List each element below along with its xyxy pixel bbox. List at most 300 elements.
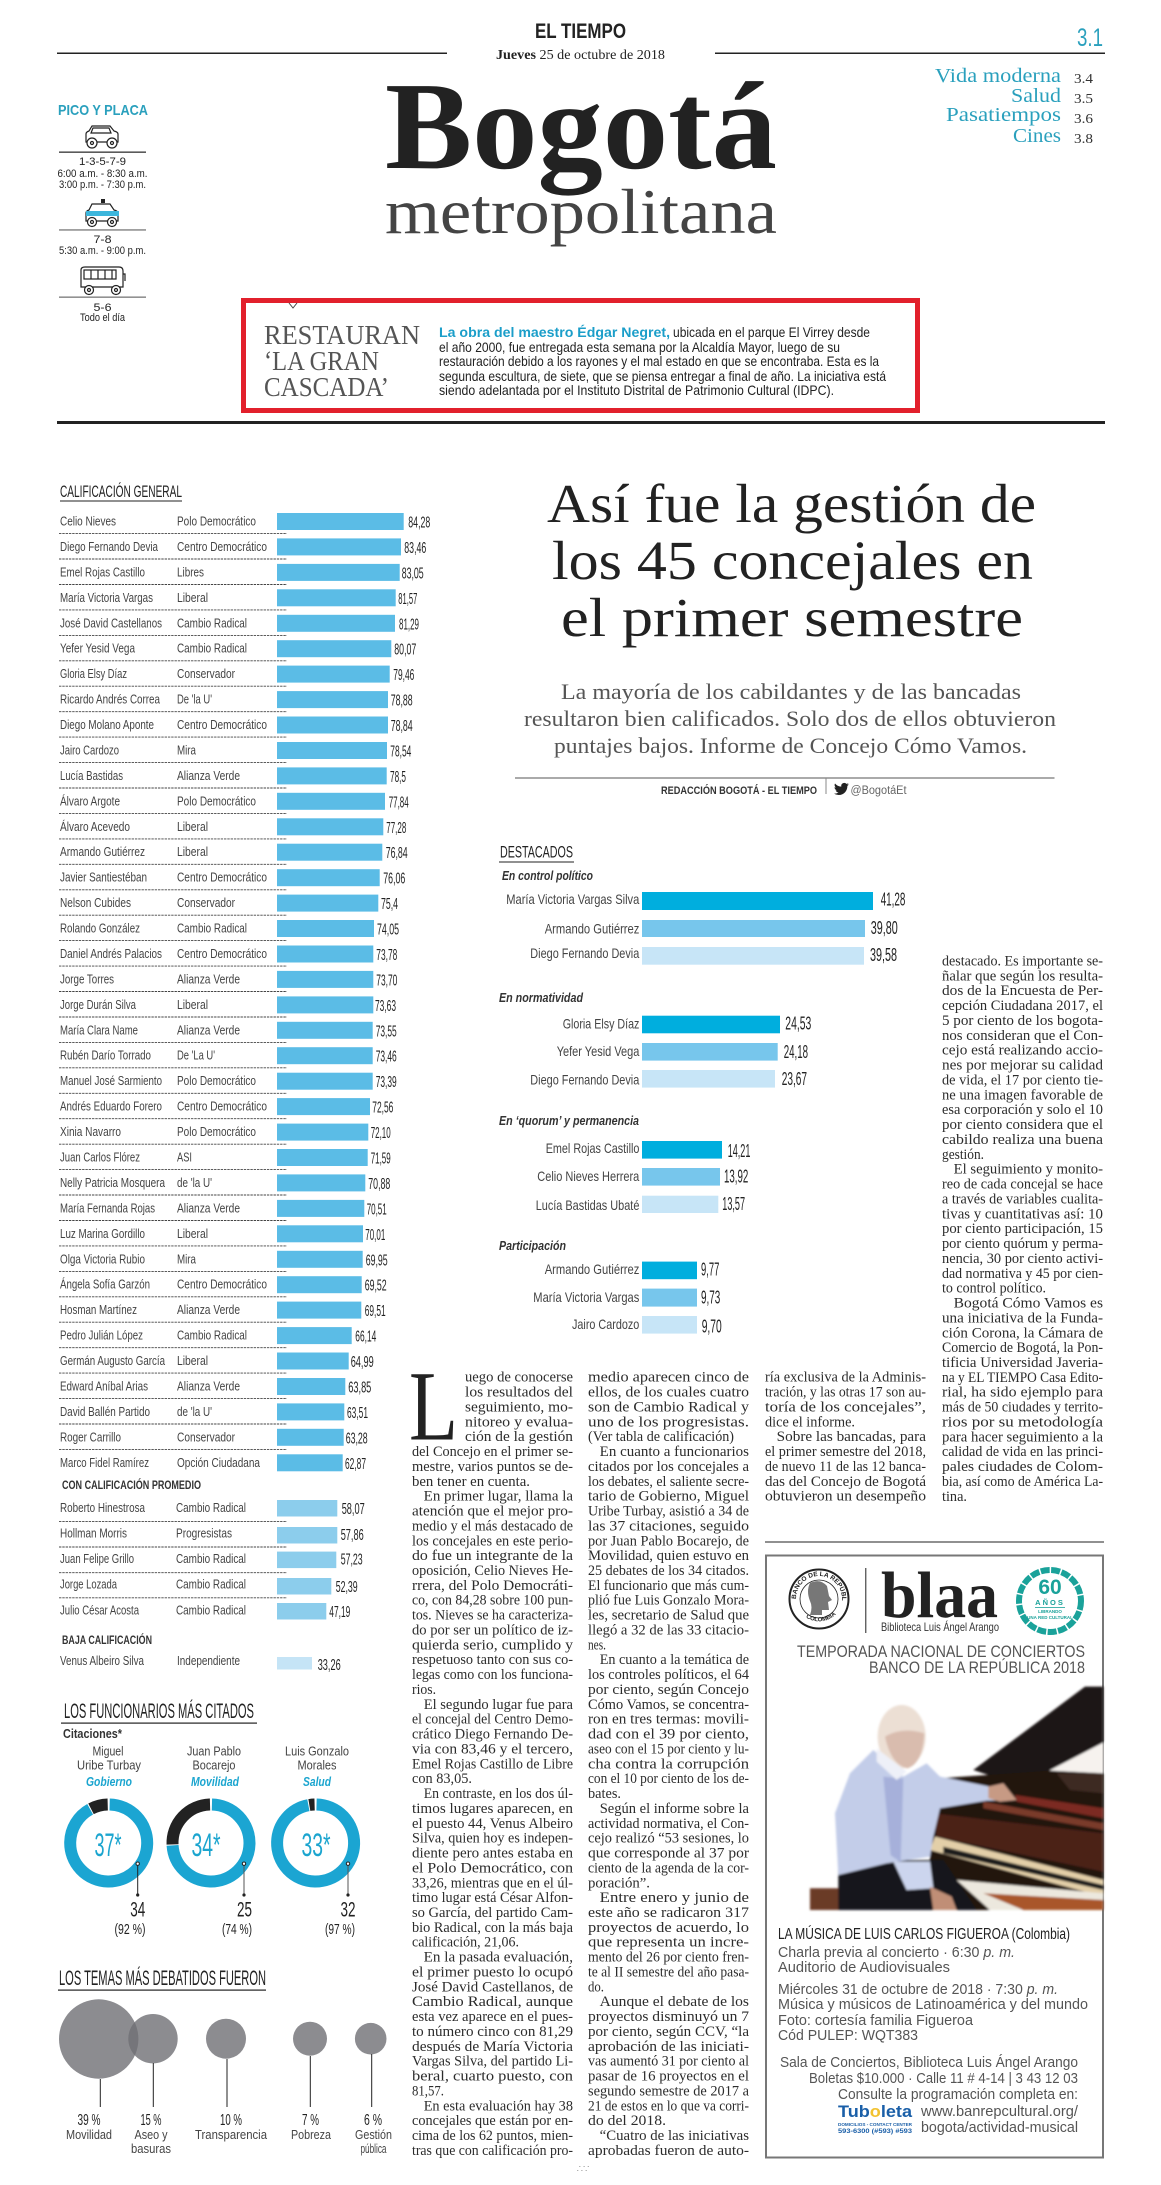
article text: column 3: el primer semestre del 2018, [765,1444,926,1460]
bar chart: participación: 9,70 [702,1316,722,1336]
article text: column 1: Cambio Radical, aunque [412,1994,573,2010]
donut: Miguel Uribe Turbay: Miguel [92,1744,124,1758]
article text: column 4: esa corporación y solo el 10 [942,1102,1103,1118]
bar chart: councillor names: Celio Nieves [60,514,116,528]
bar chart: councillor names: José David Castellanos [60,616,162,630]
heavy divider under the header [57,421,1105,424]
ad details: Boletas $10.000 · Calle 11 # 4-14 | 3 43 12 03 [809,2070,1078,2087]
article text: column 2: las 37 citaciones, seguido [588,1518,749,1534]
article text: column 2: ellos, de los cuales cuatro [588,1385,749,1401]
ad title: TEMPORADA NACIONAL DE CONCIERTOS [797,1642,1085,1661]
article text: column 2: tario de Gobierno, Miguel [588,1489,749,1505]
article text: column 1: con 83,05. [412,1771,472,1787]
bar chart: en quorum y permanencia [499,1114,750,1214]
panel: pico y placa: 3:00 p.m. - 7:30 p.m. [59,179,146,191]
logo: blaa: blaa [881,1559,998,1632]
bar chart: values: 84,28 [408,514,430,532]
article text: column 4: más de 50 ciudades y territo- [942,1400,1103,1416]
bar chart: participación: María Victoria Vargas [533,1289,639,1305]
article text: column 2: 21 de estos en lo que va corri- [588,2098,749,2114]
bubble labels: Aseo y [134,2128,168,2142]
bar chart: en quorum y permanencia: En ‘quorum’ y permanencia [499,1114,639,1128]
bar chart: participación: 9,77 [701,1259,719,1279]
article text: column 3: toría de los concejales”, [765,1399,926,1415]
bar chart: parties: Cambio Radical [177,1329,247,1343]
bar chart: values: 78,54 [390,744,412,760]
article text: column 4: nes por mejorar su calidad [942,1058,1104,1074]
subsection: con calificación promedio [60,1477,365,1621]
article text: column 2: uno de los progresistas. [588,1414,749,1430]
article text: column 2: aseo con el 15 por ciento y lu- [588,1741,749,1757]
article text: column 4: Bogotá Cómo Vamos es [954,1296,1103,1312]
callout body text: La obra del maestro Édgar Negret, [439,324,670,340]
bar chart: parties: Centro Democrático [177,1100,267,1114]
bar chart: en control político: 39,80 [871,918,898,938]
ad details: Sala de Conciertos, Biblioteca Luis Ángel Arango [780,2054,1078,2071]
article text: column 4: dos de la Encuesta de Per- [942,983,1103,999]
bar chart: en control político: María Victoria Vargas Silva [506,891,639,907]
article text: column 4: to control político. [942,1281,1046,1297]
bar chart: participación: 9,73 [701,1287,720,1307]
bar chart: councillor names: Jairo Cardozo [60,744,119,758]
article text: column 1: los concejales en este perio- [412,1533,573,1549]
heading: los funcionarios más citados: LOS FUNCIONARIOS MÁS CITADOS [64,1700,254,1723]
callout heading: CASCADA’ [264,372,389,402]
bar chart: en normatividad: En normatividad [499,991,583,1005]
bar chart: values: 81,57 [398,591,417,608]
heading: los temas más debatidos fueron: LOS TEMAS MÁS DEBATIDOS FUERON [59,1967,266,1990]
bar chart: councillor names: Nelson Cubides [60,896,131,910]
bar chart: parties: Liberal [177,820,208,834]
bar chart: values: 63,28 [346,1430,368,1447]
article text: column 4 [942,954,1104,1505]
bar chart: councillor names: Olga Victoria Rubio [60,1252,145,1266]
bar chart: councillor names: Emel Rojas Castillo [60,565,145,579]
bar chart: councillor names: Luz Marina Gordillo [60,1227,145,1241]
article text: column 2: cejo realizó “53 sesiones, lo [588,1831,749,1847]
article text: column 2: Movilidad, quien estuvo en [588,1548,750,1564]
bar chart: values [345,514,430,1473]
logo: 60 años [1019,1570,1081,1632]
article text: column 1: calificación, 21,06. [412,1935,519,1951]
donut: Luis Gonzalo Morales [271,1744,360,1938]
ad details: bogota/actividad-musical [921,2119,1078,2136]
bar chart: values: 76,84 [386,845,408,862]
article text: column 4: tivas y cuantitativas así: 10 [942,1206,1103,1222]
bar chart: en quorum y permanencia: 13,57 [722,1194,745,1214]
bar chart: parties: ASI [177,1150,192,1164]
article text: column 2: cha contra la corrupción [588,1756,750,1772]
subsection: con calificación promedio: Hollman Morris [60,1527,127,1541]
bar chart: en quorum y permanencia: 13,92 [724,1166,748,1186]
subsection: con calificación promedio: 52,39 [336,1579,358,1596]
article text: column 2: En cuanto a la temática de [600,1652,749,1668]
ad details: Música y músicos de Latinoamérica y del mundo [778,1996,1088,2013]
byline: REDACCIÓN BOGOTÁ - EL TIEMPO [661,784,817,797]
bar chart: councillor names: Diego Fernando Devia [60,540,158,554]
panel: pico y placa: 5-6 [94,302,112,314]
bar chart: participación: Jairo Cardozo [572,1316,639,1332]
bar chart: parties: Liberal [177,845,208,859]
article text: column 2: Cómo Vamos, se concentra- [588,1697,749,1713]
article text: column 4: tina. [942,1489,967,1505]
panel: los funcionarios más citados: Citaciones* [63,1727,122,1741]
bar chart: parties: de 'la U' [177,1405,212,1419]
article text: column 2: nes. [588,1637,606,1653]
bar chart: values: 64,99 [351,1354,374,1371]
article text: column 1: timo lugar está César Alfon- [412,1890,573,1906]
bar chart: councillor names: Hosman Martínez [60,1303,137,1317]
donut: Juan Pablo Bocarejo: Bocarejo [192,1758,236,1772]
subsection: con calificación promedio: Progresistas [176,1527,232,1541]
article text: column 1: bio Radical, con la más baja [412,1920,574,1936]
panel: pico y placa: Todo el día [80,312,126,324]
bar chart: en quorum y permanencia: Celio Nieves Herrera [537,1168,639,1184]
donut: Luis Gonzalo Morales: Morales [298,1758,336,1772]
subsection: con calificación promedio: CON CALIFICACIÓN PROMEDIO [62,1477,201,1492]
masthead: newspaper name, date and rules [57,20,1105,63]
article text: column 3: ría exclusiva de la Adminis- [765,1370,926,1386]
ad details: Charla previa al concierto · 6:30 p. m. [778,1944,1015,1961]
ad details: Foto: cortesía familia Figueroa [778,2012,974,2029]
article text: column 1: oposición, Celio Nieves He- [412,1563,573,1579]
article text: column 1: so García, del partido Cam- [412,1905,573,1921]
bar chart: values: 70,51 [367,1201,387,1218]
callout heading [264,320,420,402]
article text: column 2: do. [588,1979,604,1995]
bar chart: parties: de 'la U' [177,1176,212,1190]
article text: column 1: después de María Victoria [412,2039,574,2055]
bar chart: values: 62,87 [345,1456,366,1473]
bar chart: values: 78,5 [390,769,406,786]
article text: column 1: timos lugares aparecen, en [412,1801,574,1817]
bar chart: en control político: Diego Fernando Devia [530,945,639,961]
subsection: con calificación promedio: 57,23 [341,1552,363,1569]
ad details: Cód PULEP: WQT383 [778,2027,918,2044]
article text: column 3 [765,1370,927,1505]
bubble labels: Pobreza [291,2128,331,2142]
callout body text: restauración debido a los rayones y el mal estado en que se encontraba. Esta es la [439,353,879,369]
bar chart: councillor names [60,514,165,1470]
index of sections: 3.5 [1074,92,1093,107]
article text: column 1: el Polo Democrático, con [412,1860,574,1876]
callout heading: RESTAURAN [264,320,420,350]
panel: destacados [499,842,905,1336]
bubble labels: Gestión [355,2128,392,2142]
donut: Luis Gonzalo Morales: (97 %) [325,1921,355,1938]
callout body text: segunda escultura, de siete, que se piensa entregar a final de año. La iniciativa está [439,368,886,384]
article text: column 2: aprobación de las iniciati- [588,2039,749,2055]
index of sections: Cines [1013,125,1061,147]
masthead: newspaper name, date and rules: EL TIEMPO [535,20,626,43]
bar chart: values: 69,95 [366,1252,388,1269]
headline: el primer semestre [561,587,1023,648]
subsection: con calificación promedio: Cambio Radical [176,1578,246,1592]
article text: column 2: do del 2018. [588,2113,666,2129]
bar chart: values: 73,39 [376,1074,397,1091]
donut: Juan Pablo Bocarejo: 25 [237,1898,252,1922]
ad title: BANCO DE LA REPÚBLICA 2018 [869,1658,1085,1677]
subheadline [524,679,1056,758]
subsection: con calificación promedio: Cambio Radical [176,1604,246,1618]
subsection: baja calificación [60,1632,341,1674]
article text: column 3: Sobre las bancadas, para [777,1429,927,1445]
subsection: baja calificación: Venus Albeiro Silva [60,1654,144,1668]
article text: column 1: el concejal del Centro Demo- [412,1712,573,1728]
article text: column 2: este año se radicaron 317 [588,1905,749,1921]
bar chart: parties: Conservador [177,1430,235,1444]
article text: column 3: das del Concejo de Bogotá [765,1474,927,1490]
article text: column 1: 81,57. [412,2083,444,2099]
article text: column 4: cejo está realizando accio- [942,1043,1103,1059]
bar chart: parties: Cambio Radical [177,922,247,936]
subsection: baja calificación: Independiente [177,1654,240,1668]
donut: Miguel Uribe Turbay: Uribe Turbay [77,1758,142,1772]
article text: column 1: los resultados del [465,1385,573,1401]
subsection: con calificación promedio: 47,19 [329,1604,350,1621]
article text: column 1: concejales que están por en- [412,2113,573,2129]
donut: Miguel Uribe Turbay: Gobierno [86,1775,132,1789]
bar chart: councillor names: Álvaro Acevedo [60,819,130,834]
bar chart: parties: Mira [177,744,196,758]
bar chart: values: 72,10 [371,1125,391,1142]
article text: column 2: pasar de 16 proyectos en el [588,2069,749,2085]
bar chart: councillor names: Gloria Elsy Díaz [60,667,127,681]
bar chart: en normatividad: Diego Fernando Devia [530,1071,639,1087]
article text: column 1: to número cinco con 81,29 [412,2024,573,2040]
callout body text [439,324,886,398]
article text: column 4: por ciento participación, 15 [942,1221,1103,1237]
bar chart: values: 81,29 [399,616,419,633]
article text: column 4: rial, ha sido ejemplo para [942,1385,1104,1401]
panel: los funcionarios más citados [57,1700,360,1938]
bar chart: parties: Polo Democrático [177,1074,256,1088]
photo: pianist at the piano [810,1687,1103,1910]
article text: column 4: a través de variables cualita- [942,1191,1103,1207]
article text: column 3: obtuvieron un desempeño [765,1489,926,1505]
article text: column 2: llegó a 32 de las 33 citacio- [588,1622,749,1638]
article text: column 2: Entre enero y junio de [600,1890,749,1906]
bar chart: en normatividad: Gloria Elsy Díaz [563,1016,639,1032]
heading: calificación general [60,482,182,502]
subsection: baja calificación: 33,26 [318,1657,341,1674]
bar chart: participación: Armando Gutiérrez [545,1261,639,1277]
bar chart: councillor names: Xinia Navarro [60,1125,121,1139]
article text: column 1: Silva, quien hoy es indepen- [412,1831,573,1847]
bar chart: parties: Polo Democrático [177,794,256,808]
bar chart: councillor names: María Victoria Vargas [60,591,153,605]
bar chart: councillor names: Diego Molano Aponte [60,718,154,732]
donut: Miguel Uribe Turbay: 34 [130,1898,145,1922]
bar chart: parties: Alianza Verde [177,769,240,783]
bar chart: councillor names: Yefer Yesid Vega [60,642,135,656]
article text: column 2: te al II semestre del año pasa- [588,1964,749,1980]
article text: column 1: diente pero antes estaba en [412,1846,574,1862]
article text: column 1: del Concejo en el primer se- [412,1444,573,1460]
panel: pico y placa: 5:30 a.m. - 9:00 p.m. [59,245,146,257]
article text: column 1: legas como con los funciona- [412,1667,573,1683]
article text: column 4: Comercio de Bogotá, la Pon- [942,1340,1103,1356]
article text: column 4: nencia, 30 por ciento activi- [942,1251,1103,1267]
bar chart: councillor names: Ricardo Andrés Correa [60,693,160,707]
article text: column 1: medio y el más destacado de [412,1518,573,1534]
logo: 60 años: LIBRANDO [1038,1609,1062,1614]
donut: Luis Gonzalo Morales: 32 [340,1898,356,1922]
bar chart: parties: De 'La U' [177,1049,215,1063]
callout body text: el año 2000, fue entregada esta semana por la Alcaldía Mayor, luego de su [439,339,840,355]
article text: column 2: “Cuatro de las iniciativas [600,2128,749,2144]
headline [547,473,1036,648]
article text: column 2: citados por los concejales a [588,1459,750,1475]
bar chart: parties: Alianza Verde [177,1303,240,1317]
article text: column 1: Emel Rojas Castillo de Libre [412,1756,573,1772]
article text: column 1: rrera, del Polo Democráti- [412,1578,573,1594]
bar chart: values: 75,4 [381,896,398,913]
bubble labels: 7 % [302,2112,319,2129]
bar chart: parties: Mira [177,1252,196,1266]
bar chart: values: 73,63 [375,998,396,1015]
drop cap: L [409,1350,458,1462]
article text: column 2: que corresponde al 37 por [588,1846,749,1862]
bar chart: councillor names: Lucía Bastidas [60,769,123,783]
bar chart: values: 63,51 [347,1405,368,1422]
bar chart: councillor names: Andrés Eduardo Forero [60,1100,162,1114]
article text: column 2: Aunque el debate de los [600,1994,749,2010]
index of sections: 3.6 [1074,112,1093,127]
article text: column 4: nos consideran que el Con- [942,1028,1103,1044]
article text: column 2: que representa un incre- [588,1935,749,1951]
article text: column 2: ciento de la agenda de la cor- [588,1860,749,1876]
ad details: Consulte la programación completa en: [838,2086,1078,2103]
bar chart: councillor names: Nelly Patricia Mosquera [60,1176,165,1190]
article text: column 1: el puesto 44, Venus Albeiro [412,1816,573,1832]
donut: Luis Gonzalo Morales: Luis Gonzalo [285,1744,349,1758]
article text: column 2: les, secretario de Salud que [588,1608,749,1624]
article text: column 2: segundo semestre de 2017 a [588,2083,750,2099]
subsection: con calificación promedio: Cambio Radical [176,1552,246,1566]
bar chart: en control político: En control político [502,869,593,883]
article text: column 1: via con 83,46 y el tercero, [412,1741,573,1757]
article text: column 4: bia, así como de América La- [942,1474,1103,1490]
subsection: con calificación promedio: Cambio Radical [176,1501,246,1515]
article text: column 1: respetuoso tanto con sus co- [412,1652,573,1668]
bar chart: en control político [502,869,905,965]
article text: column 1: En contraste, en los dos úl- [424,1786,573,1802]
article text: column 4: cabildo realiza una buena [942,1132,1104,1148]
logo: 60 años: AÑOS [1035,1598,1065,1607]
masthead: newspaper name, date and rules: Jueves 25 de octubre de 2018 [496,48,665,63]
bar chart: values: 77,84 [389,794,409,811]
bar chart: parties: Opción Ciudadana [177,1456,260,1470]
logo: Banco de la República seal: COLOMBIA [806,1612,836,1622]
article text: column 1: el primer puesto lo ocupó [412,1964,573,1980]
article text: column 1: nitoreo y evalua- [465,1414,573,1430]
article text: column 1: seguimiento, mo- [465,1399,573,1415]
article text: column 2: por ciento, según Concejo [588,1682,749,1698]
bar chart: en control político: 39,58 [870,945,897,965]
bar chart: parties: Polo Democrático [177,1125,256,1139]
bar chart: councillor names: David Ballén Partido [60,1405,150,1419]
bubble labels: basuras [131,2142,171,2156]
ad details: Miércoles 31 de octubre de 2018 · 7:30 p. m. [778,1981,1058,1998]
bar chart: parties: Conservador [177,667,235,681]
bar chart: parties: Liberal [177,998,208,1012]
ad details: Auditorio de Audiovisuales [778,1959,950,1976]
subsection: con calificación promedio: Juan Felipe Grillo [60,1552,134,1566]
article text: column 1 [412,1370,574,2159]
bar chart: parties: Centro Democrático [177,871,267,885]
bar chart: parties: Alianza Verde [177,1201,240,1215]
bar chart: values: 79,46 [393,667,414,684]
bubble labels: pública [360,2142,387,2156]
bar chart: en normatividad: Yefer Yesid Vega [557,1043,640,1059]
bar chart: values: 83,05 [402,565,424,582]
donut: Miguel Uribe Turbay [57,1744,161,1938]
icon: twitter bird [834,783,849,795]
article text: column 2: En cuanto a funcionarios [600,1444,749,1460]
article text: column 2: dad con el 39 por ciento, [588,1727,749,1743]
bar chart: parties: Alianza Verde [177,1380,240,1394]
article text: column 1: José David Castellanos, de [412,1979,573,1995]
icon: taxi [86,199,119,226]
bar chart: councillor names: Pedro Julián López [60,1329,143,1343]
panel: calificación general [59,482,430,1674]
logo: Banco de la República seal [788,1568,850,1630]
heading: pico y placa: PICO Y PLACA [58,102,148,119]
bar chart: values: 80,07 [394,642,416,659]
subsection: con calificación promedio: 57,86 [341,1527,364,1544]
registration mark: ∴∵ [577,2164,589,2175]
bar chart: parties: Centro Democrático [177,540,267,554]
article text: column 4: de vida, el 17 por ciento tie- [942,1072,1103,1088]
bubble labels: 10 % [220,2112,242,2129]
bar chart: values: 74,05 [377,922,399,938]
article text: column 2: los debates, el saliente secre- [588,1474,749,1490]
callout body text: siendo adelantada por el Instituto Distrital de Patrimonio Cultural (IDPC). [439,382,834,398]
index of sections: Pasatiempos [946,104,1061,126]
index of sections [935,65,1093,147]
bar chart: en normatividad [499,991,811,1089]
bar chart: en quorum y permanencia: Lucía Bastidas Ubaté [536,1197,640,1213]
bar chart: en control político: Armando Gutiérrez [545,920,639,936]
donut: Juan Pablo Bocarejo: 34* [192,1827,220,1863]
bar chart: values: 78,88 [391,693,413,710]
article text: column 4: El seguimiento y monito- [954,1162,1103,1178]
bar chart: councillor names: Edward Aníbal Arias [60,1380,148,1394]
article text: column 1: En la pasada evaluación, [424,1950,573,1966]
article text: column 2: proyectos de acuerdo, lo [588,1920,749,1936]
panel: pico y placa: 6:00 a.m. - 8:30 a.m. [58,168,148,180]
article text: column 1: 33,26, mientras que en el úl- [412,1875,573,1891]
article text: column 1: El segundo lugar fue para [424,1697,574,1713]
article text: column 2: bates. [588,1786,621,1802]
article text: column 4: dad normativa y 45 por cien- [942,1266,1103,1282]
bar chart: parties: Cambio Radical [177,616,247,630]
bar chart: councillor names: Rubén Darío Torrado [60,1049,151,1063]
bar chart: parties: Alianza Verde [177,972,240,986]
bubble labels: Movilidad [66,2128,112,2142]
divider in the logo row [865,1568,866,1633]
bar chart: parties: Centro Democrático [177,718,267,732]
logo: Banco de la República seal: BANCO DE LA REPÚBLICA [792,1572,846,1600]
article text: column 4: na y EL TIEMPO Casa Edito- [942,1370,1103,1386]
article text: column 1: mestre, varios puntos se de- [412,1459,573,1475]
heading: destacados: DESTACADOS [500,842,573,862]
headline: Así fue la gestión de [547,473,1036,534]
bubble labels: Transparencia [195,2128,267,2142]
article text: column 1: atención que el mejor pro- [412,1504,573,1520]
article text: column 1: uego de conocerse [465,1370,573,1386]
